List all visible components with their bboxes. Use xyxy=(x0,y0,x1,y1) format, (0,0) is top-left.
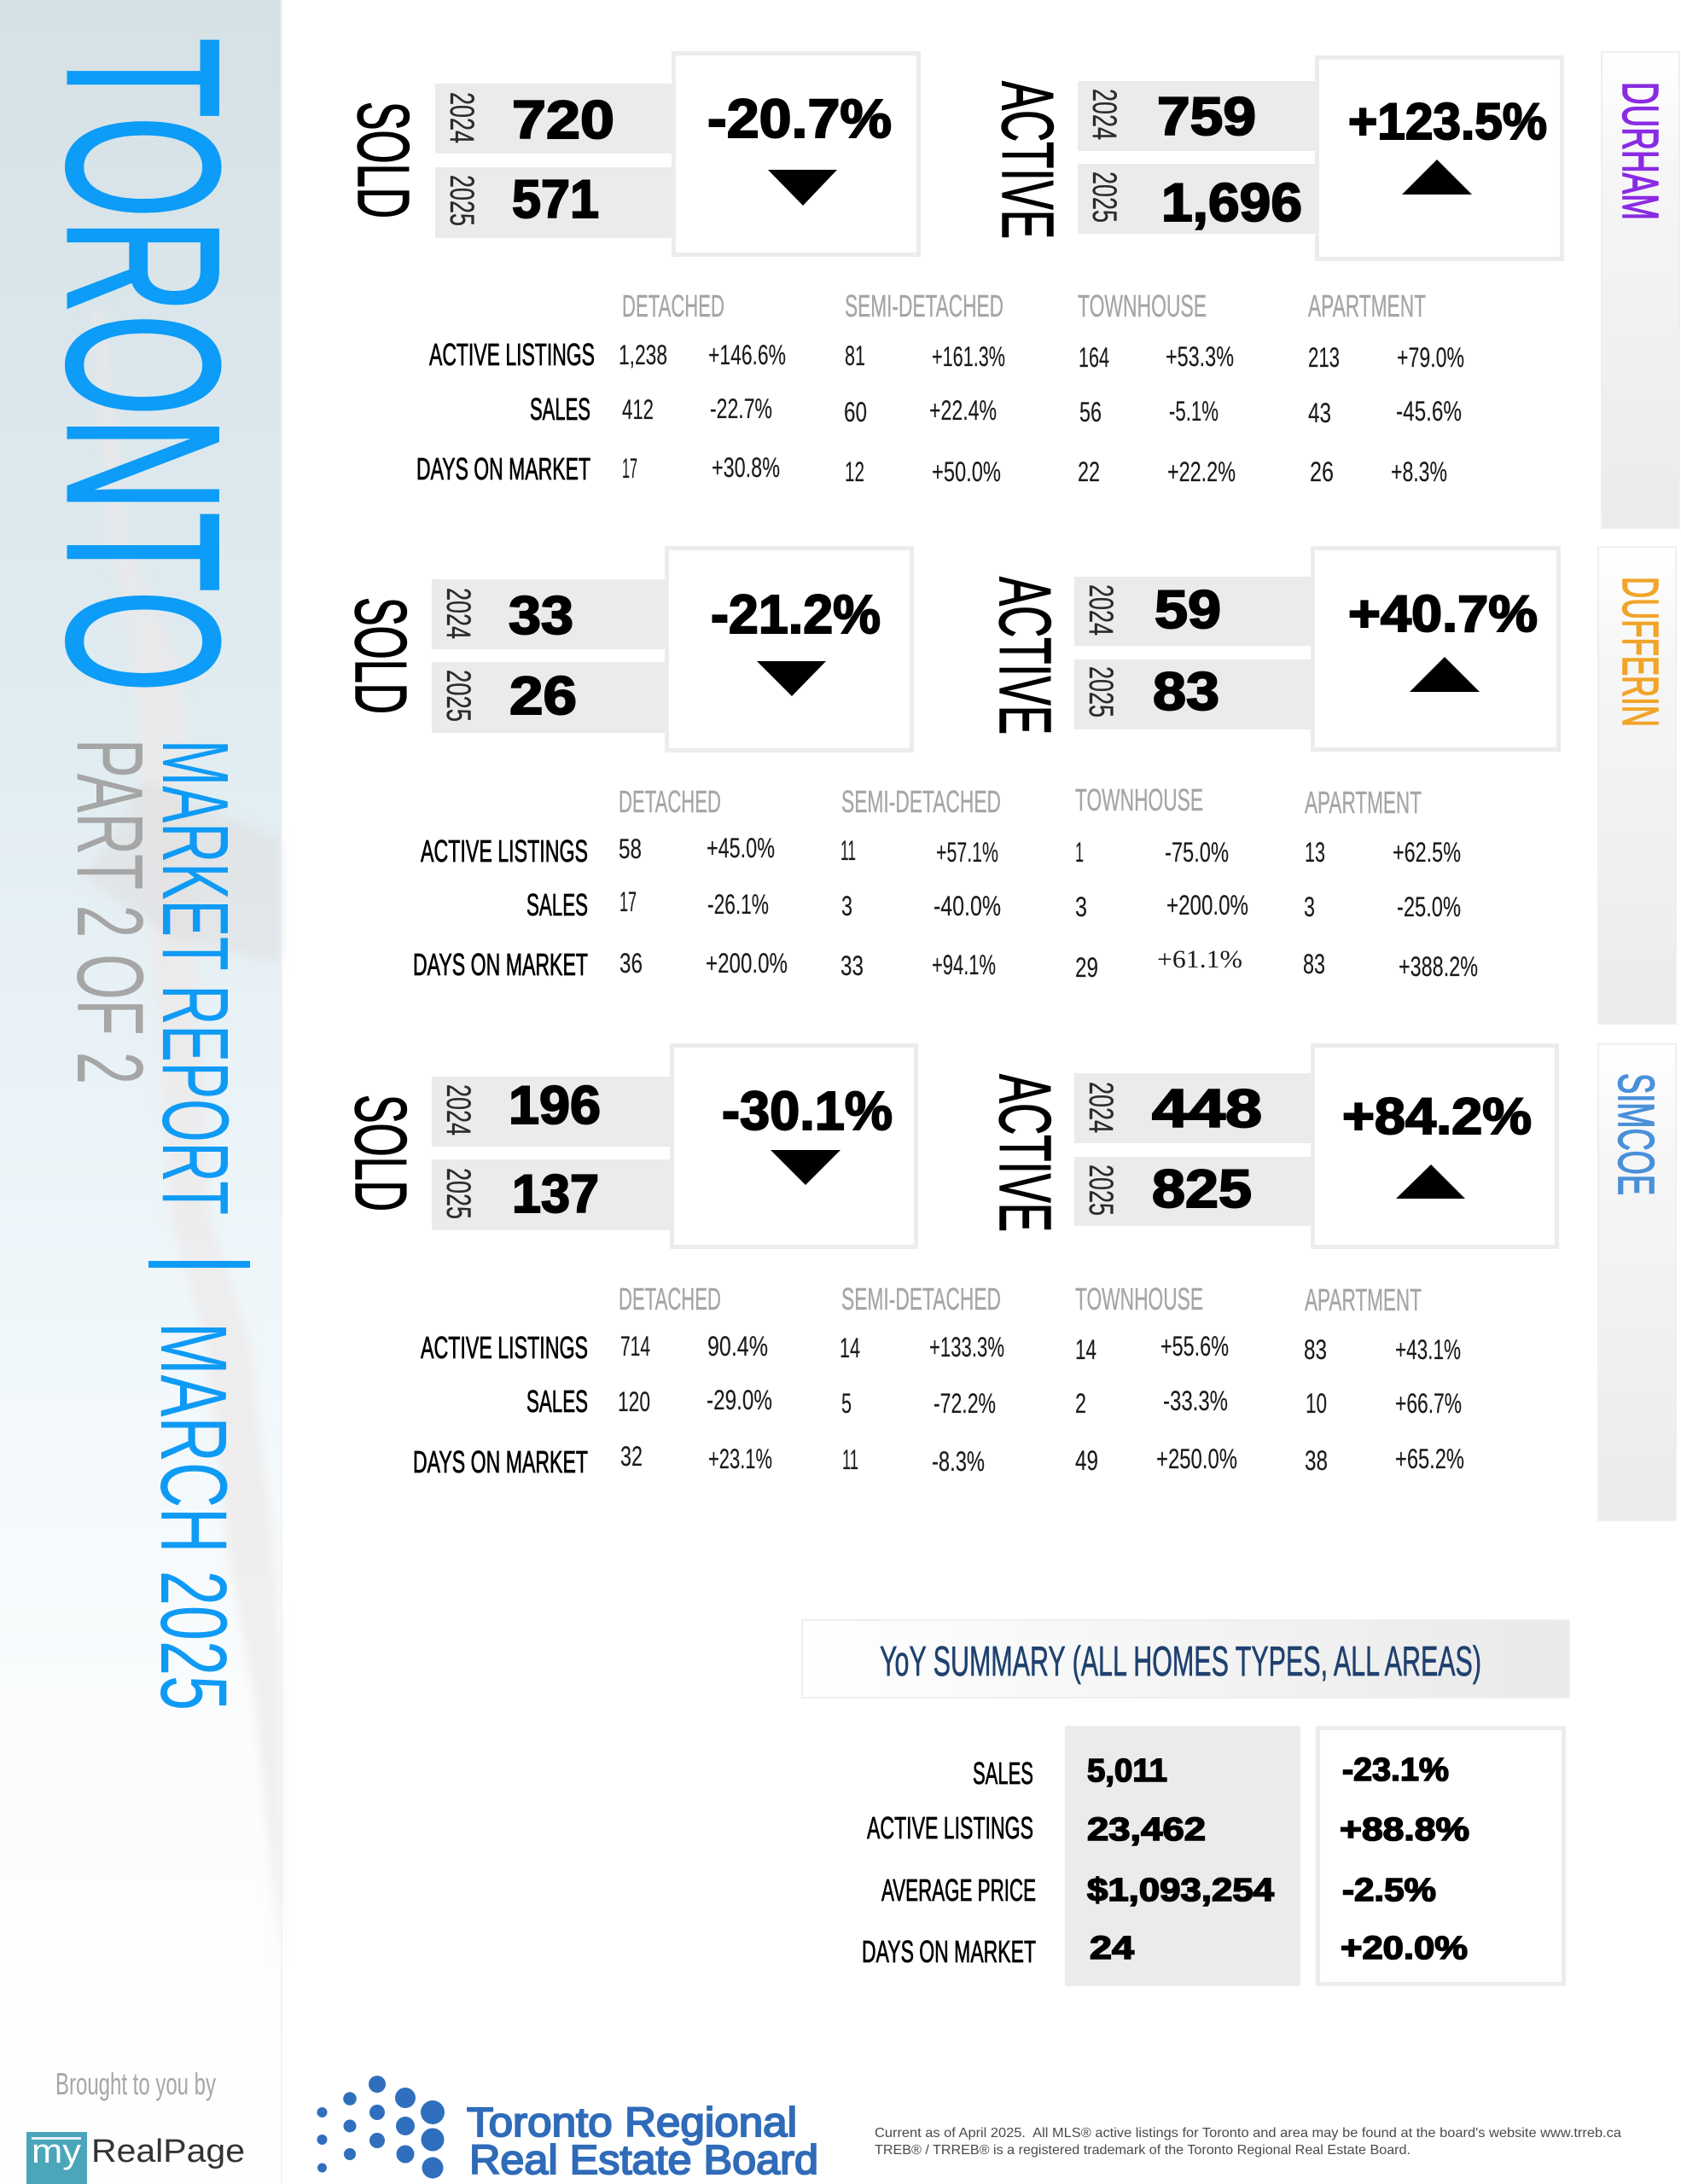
region tab: Durham xyxy=(1602,52,1679,528)
row: days on market: 38 xyxy=(1305,1445,1328,1476)
row: days on market: +61.1% xyxy=(1157,945,1242,973)
sold comparison: 2025 xyxy=(443,175,480,226)
row: days on market: +250.0% xyxy=(1156,1443,1237,1474)
row: active listings: +57.1% xyxy=(936,837,998,868)
row: sales: -33.3% xyxy=(1163,1385,1228,1416)
row: sales: SALES xyxy=(530,392,590,427)
row: sales: -22.7% xyxy=(710,393,772,424)
active comparison xyxy=(984,548,1558,749)
table headers: DETACHED xyxy=(619,1281,721,1316)
sold comparison xyxy=(340,548,911,751)
table headers: DETACHED xyxy=(622,288,724,323)
summary heading xyxy=(802,1620,1569,1698)
table headers xyxy=(622,288,1426,323)
arrow down xyxy=(771,1150,840,1185)
active comparison: 825 xyxy=(1152,1159,1252,1219)
row: active listings: 14 xyxy=(1075,1334,1096,1365)
logo dots xyxy=(317,2076,445,2179)
active comparison: 2024 xyxy=(1085,89,1123,140)
row: days on market: +22.2% xyxy=(1167,456,1236,487)
region tab: Dufferin: DUFFERIN xyxy=(1612,577,1668,727)
table headers: APARTMENT xyxy=(1305,785,1422,820)
subtitle: market report: MARKET REPORT xyxy=(143,740,247,1215)
row: sales: -29.0% xyxy=(707,1385,772,1415)
row: active listings: ACTIVE LISTINGS xyxy=(421,1330,588,1365)
row: sales xyxy=(530,392,1462,428)
summary changes: -2.5% xyxy=(1342,1873,1436,1908)
row: active listings: +55.6% xyxy=(1160,1331,1229,1362)
row: active listings: 714 xyxy=(620,1331,650,1362)
row: active listings: 1,238 xyxy=(619,340,667,370)
row: days on market: 32 xyxy=(620,1441,643,1472)
divider bar xyxy=(148,1261,250,1268)
panel: YoY summary xyxy=(802,1620,1569,1986)
arrow down xyxy=(757,661,826,696)
row: sales: 10 xyxy=(1306,1388,1327,1419)
region tab: Simcoe: SIMCOE xyxy=(1608,1073,1664,1195)
row: active listings: -75.0% xyxy=(1165,837,1229,868)
row: sales: -72.2% xyxy=(934,1388,996,1419)
arrow up xyxy=(1410,657,1480,692)
sold heading: SOLD xyxy=(342,102,423,218)
row: days on market: +94.1% xyxy=(932,950,996,980)
table headers: SEMI-DETACHED xyxy=(845,288,1003,323)
active comparison: 759 xyxy=(1157,87,1256,147)
summary labels: ACTIVE LISTINGS xyxy=(867,1810,1033,1845)
row: sales: +22.4% xyxy=(929,395,997,426)
home type table xyxy=(413,1281,1464,1479)
active comparison xyxy=(986,58,1562,259)
row: days on market: 22 xyxy=(1078,456,1100,487)
arrow up xyxy=(1396,1165,1465,1199)
row: active listings: +146.6% xyxy=(708,340,786,370)
row: days on market: DAYS ON MARKET xyxy=(413,1444,588,1479)
panel: Simcoe xyxy=(340,1044,1676,1520)
row: days on market: 26 xyxy=(1310,456,1334,487)
summary values: 23,462 xyxy=(1087,1812,1206,1848)
row: sales: 3 xyxy=(841,891,852,921)
sidebar background xyxy=(0,0,282,2184)
row: active listings: ACTIVE LISTINGS xyxy=(429,337,595,372)
subtitle: part 2 of 2: PART 2 OF 2 xyxy=(57,739,162,1084)
logo wordmark xyxy=(467,2100,818,2183)
summary labels xyxy=(862,1756,1036,1969)
row: active listings: +133.3% xyxy=(929,1332,1004,1362)
active comparison: 2025 xyxy=(1082,666,1120,717)
row: days on market xyxy=(413,1441,1464,1479)
table headers: DETACHED xyxy=(619,784,721,819)
summary values: 5,011 xyxy=(1087,1753,1167,1789)
row: days on market: 17 xyxy=(622,453,637,484)
row: sales: 3 xyxy=(1304,892,1315,922)
sold comparison: 137 xyxy=(512,1165,599,1224)
active comparison: 448 xyxy=(1152,1079,1262,1139)
logo: myRealPage: RealPage xyxy=(91,2134,245,2169)
active heading: ACTIVE xyxy=(986,81,1067,239)
active comparison xyxy=(984,1046,1556,1247)
sold comparison: 2024 xyxy=(439,1084,477,1136)
row: active listings: 164 xyxy=(1079,342,1109,373)
row: sales: -25.0% xyxy=(1397,892,1461,922)
row: days on market: +30.8% xyxy=(712,452,780,483)
table headers: APARTMENT xyxy=(1308,288,1426,323)
row: active listings: ACTIVE LISTINGS xyxy=(421,834,588,868)
sold comparison: 2025 xyxy=(439,1168,477,1219)
row: days on market xyxy=(416,451,1447,487)
table headers: SEMI-DETACHED xyxy=(841,1281,1001,1316)
sold comparison: 2025 xyxy=(439,670,477,722)
row: active listings: 14 xyxy=(840,1333,860,1363)
table headers: TOWNHOUSE xyxy=(1075,782,1203,817)
panel: left sidebar xyxy=(0,0,282,2184)
row: active listings: +45.0% xyxy=(707,833,775,863)
panel: Durham xyxy=(342,52,1679,528)
row: sales: SALES xyxy=(526,887,588,922)
row: days on market: +50.0% xyxy=(932,456,1001,487)
row: sales: 3 xyxy=(1075,892,1087,922)
row: days on market: +200.0% xyxy=(706,948,788,979)
active comparison: 1,696 xyxy=(1161,173,1302,233)
logo: myRealPage xyxy=(26,2132,245,2184)
summary changes: -23.1% xyxy=(1342,1752,1449,1788)
row: days on market xyxy=(413,945,1478,983)
row: active listings: +161.3% xyxy=(932,341,1005,372)
footer disclaimer: Current as of April 2025. All MLS® active listings for Toronto and area may be found at the board's website www.trreb.ca xyxy=(875,2126,1621,2140)
region tab: Dufferin xyxy=(1598,547,1676,1024)
logo wordmark: Toronto Regional xyxy=(467,2100,797,2146)
sold heading: SOLD xyxy=(340,597,421,714)
row: active listings: 1 xyxy=(1075,837,1084,868)
summary values xyxy=(1065,1726,1300,1986)
summary changes xyxy=(1317,1728,1563,1984)
panel: Dufferin xyxy=(340,547,1676,1024)
active comparison: +40.7% xyxy=(1348,585,1538,642)
row: active listings: 58 xyxy=(619,834,642,864)
row: sales: +66.7% xyxy=(1395,1388,1462,1419)
row: active listings xyxy=(429,337,1464,373)
active comparison: 59 xyxy=(1155,580,1221,640)
sold comparison: 2024 xyxy=(439,588,477,639)
summary labels: SALES xyxy=(973,1756,1033,1791)
sold heading: SOLD xyxy=(340,1095,421,1211)
row: active listings: +79.0% xyxy=(1397,342,1464,373)
CN tower faint photo xyxy=(85,307,282,1962)
sold comparison: -21.2% xyxy=(711,584,881,645)
row: active listings: +43.1% xyxy=(1395,1334,1461,1365)
row: days on market: +8.3% xyxy=(1391,456,1447,487)
sold comparison: 2024 xyxy=(443,92,480,143)
row: sales: 5 xyxy=(841,1388,852,1419)
row: sales: SALES xyxy=(526,1384,588,1419)
row: sales: +200.0% xyxy=(1166,890,1248,921)
logo: myRealPage: my xyxy=(32,2133,81,2170)
sold comparison: 26 xyxy=(509,666,577,726)
row: active listings: +53.3% xyxy=(1166,341,1234,372)
summary values: 24 xyxy=(1090,1931,1134,1966)
row: days on market: 12 xyxy=(845,456,864,487)
brought to you by: Brought to you by xyxy=(55,2066,216,2101)
row: active listings xyxy=(421,1330,1461,1365)
region tab: Durham: DURHAM xyxy=(1612,82,1668,220)
table headers: SEMI-DETACHED xyxy=(841,784,1001,819)
row: sales: 412 xyxy=(622,394,654,425)
table headers: APARTMENT xyxy=(1305,1282,1422,1317)
row: days on market: +65.2% xyxy=(1395,1443,1464,1474)
home type table xyxy=(416,288,1464,487)
row: active listings: 13 xyxy=(1305,837,1325,868)
row: active listings: 81 xyxy=(845,340,865,371)
row: active listings: +62.5% xyxy=(1393,837,1461,868)
row: days on market: DAYS ON MARKET xyxy=(413,947,588,982)
logo wordmark: Real Estate Board xyxy=(469,2138,818,2183)
row: sales: -26.1% xyxy=(707,889,769,920)
row: sales: 43 xyxy=(1308,398,1331,428)
row: sales: 56 xyxy=(1079,397,1102,427)
summary values: $1,093,254 xyxy=(1087,1873,1274,1908)
row: active listings: 213 xyxy=(1308,342,1340,373)
summary changes: +20.0% xyxy=(1341,1931,1468,1966)
footer disclaimer: TREB® / TRREB® is a registered trademark of the Toronto Regional Real Estate Board. xyxy=(875,2143,1411,2158)
region tab: Simcoe xyxy=(1598,1044,1676,1520)
active comparison: 83 xyxy=(1153,662,1219,722)
row: days on market: 11 xyxy=(842,1444,858,1475)
row: days on market: 33 xyxy=(840,950,864,981)
footer disclaimer xyxy=(875,2126,1621,2158)
row: days on market: DAYS ON MARKET xyxy=(416,451,590,486)
row: active listings: 83 xyxy=(1304,1334,1327,1365)
active comparison: +84.2% xyxy=(1342,1088,1532,1145)
row: days on market: 83 xyxy=(1303,949,1325,979)
logo: Toronto Regional Real Estate Board xyxy=(317,2076,818,2183)
subtitle: March 2025: MARCH 2025 xyxy=(141,1322,246,1711)
row: sales: -40.0% xyxy=(934,891,1001,921)
table headers xyxy=(619,1281,1422,1317)
active comparison: 2024 xyxy=(1082,584,1120,636)
summary changes: +88.8% xyxy=(1340,1812,1469,1848)
row: days on market: 29 xyxy=(1075,952,1098,983)
summary labels: AVERAGE PRICE xyxy=(881,1873,1036,1908)
home type table xyxy=(413,782,1478,983)
active comparison: +123.5% xyxy=(1348,93,1547,150)
row: sales: -45.6% xyxy=(1396,396,1462,427)
row: sales: -5.1% xyxy=(1169,396,1219,427)
summary labels: DAYS ON MARKET xyxy=(862,1934,1036,1969)
row: sales: 17 xyxy=(619,886,637,917)
row: sales: 2 xyxy=(1075,1388,1086,1419)
row: days on market: +388.2% xyxy=(1399,951,1478,982)
row: sales: 120 xyxy=(618,1386,650,1417)
active comparison: 2025 xyxy=(1085,171,1123,223)
row: active listings: 11 xyxy=(840,835,856,866)
active comparison: 2025 xyxy=(1082,1165,1120,1216)
row: sales xyxy=(526,1384,1462,1419)
sold comparison: 196 xyxy=(509,1076,601,1136)
sold comparison: 571 xyxy=(512,170,599,229)
active heading: ACTIVE xyxy=(984,1074,1065,1232)
sold comparison: 720 xyxy=(512,90,614,150)
arrow down xyxy=(768,170,837,206)
row: active listings xyxy=(421,833,1461,868)
row: days on market: +23.1% xyxy=(708,1443,772,1474)
active heading: ACTIVE xyxy=(984,577,1065,735)
row: sales: 60 xyxy=(844,397,867,427)
sold comparison xyxy=(342,53,918,254)
sold comparison: 33 xyxy=(509,586,573,646)
sold comparison: -20.7% xyxy=(707,88,892,149)
row: days on market: 49 xyxy=(1075,1445,1098,1476)
row: days on market: -8.3% xyxy=(932,1446,985,1477)
title: Toronto: TORONTO xyxy=(21,38,265,693)
active comparison: 2024 xyxy=(1082,1082,1120,1133)
row: days on market: 36 xyxy=(619,948,643,979)
table headers: TOWNHOUSE xyxy=(1078,288,1207,323)
sold comparison xyxy=(340,1046,916,1247)
arrow up xyxy=(1402,160,1472,195)
row: active listings: 90.4% xyxy=(707,1331,768,1362)
sold comparison: -30.1% xyxy=(722,1080,893,1141)
table headers xyxy=(619,782,1422,820)
row: sales xyxy=(526,886,1461,922)
table headers: TOWNHOUSE xyxy=(1075,1281,1203,1316)
